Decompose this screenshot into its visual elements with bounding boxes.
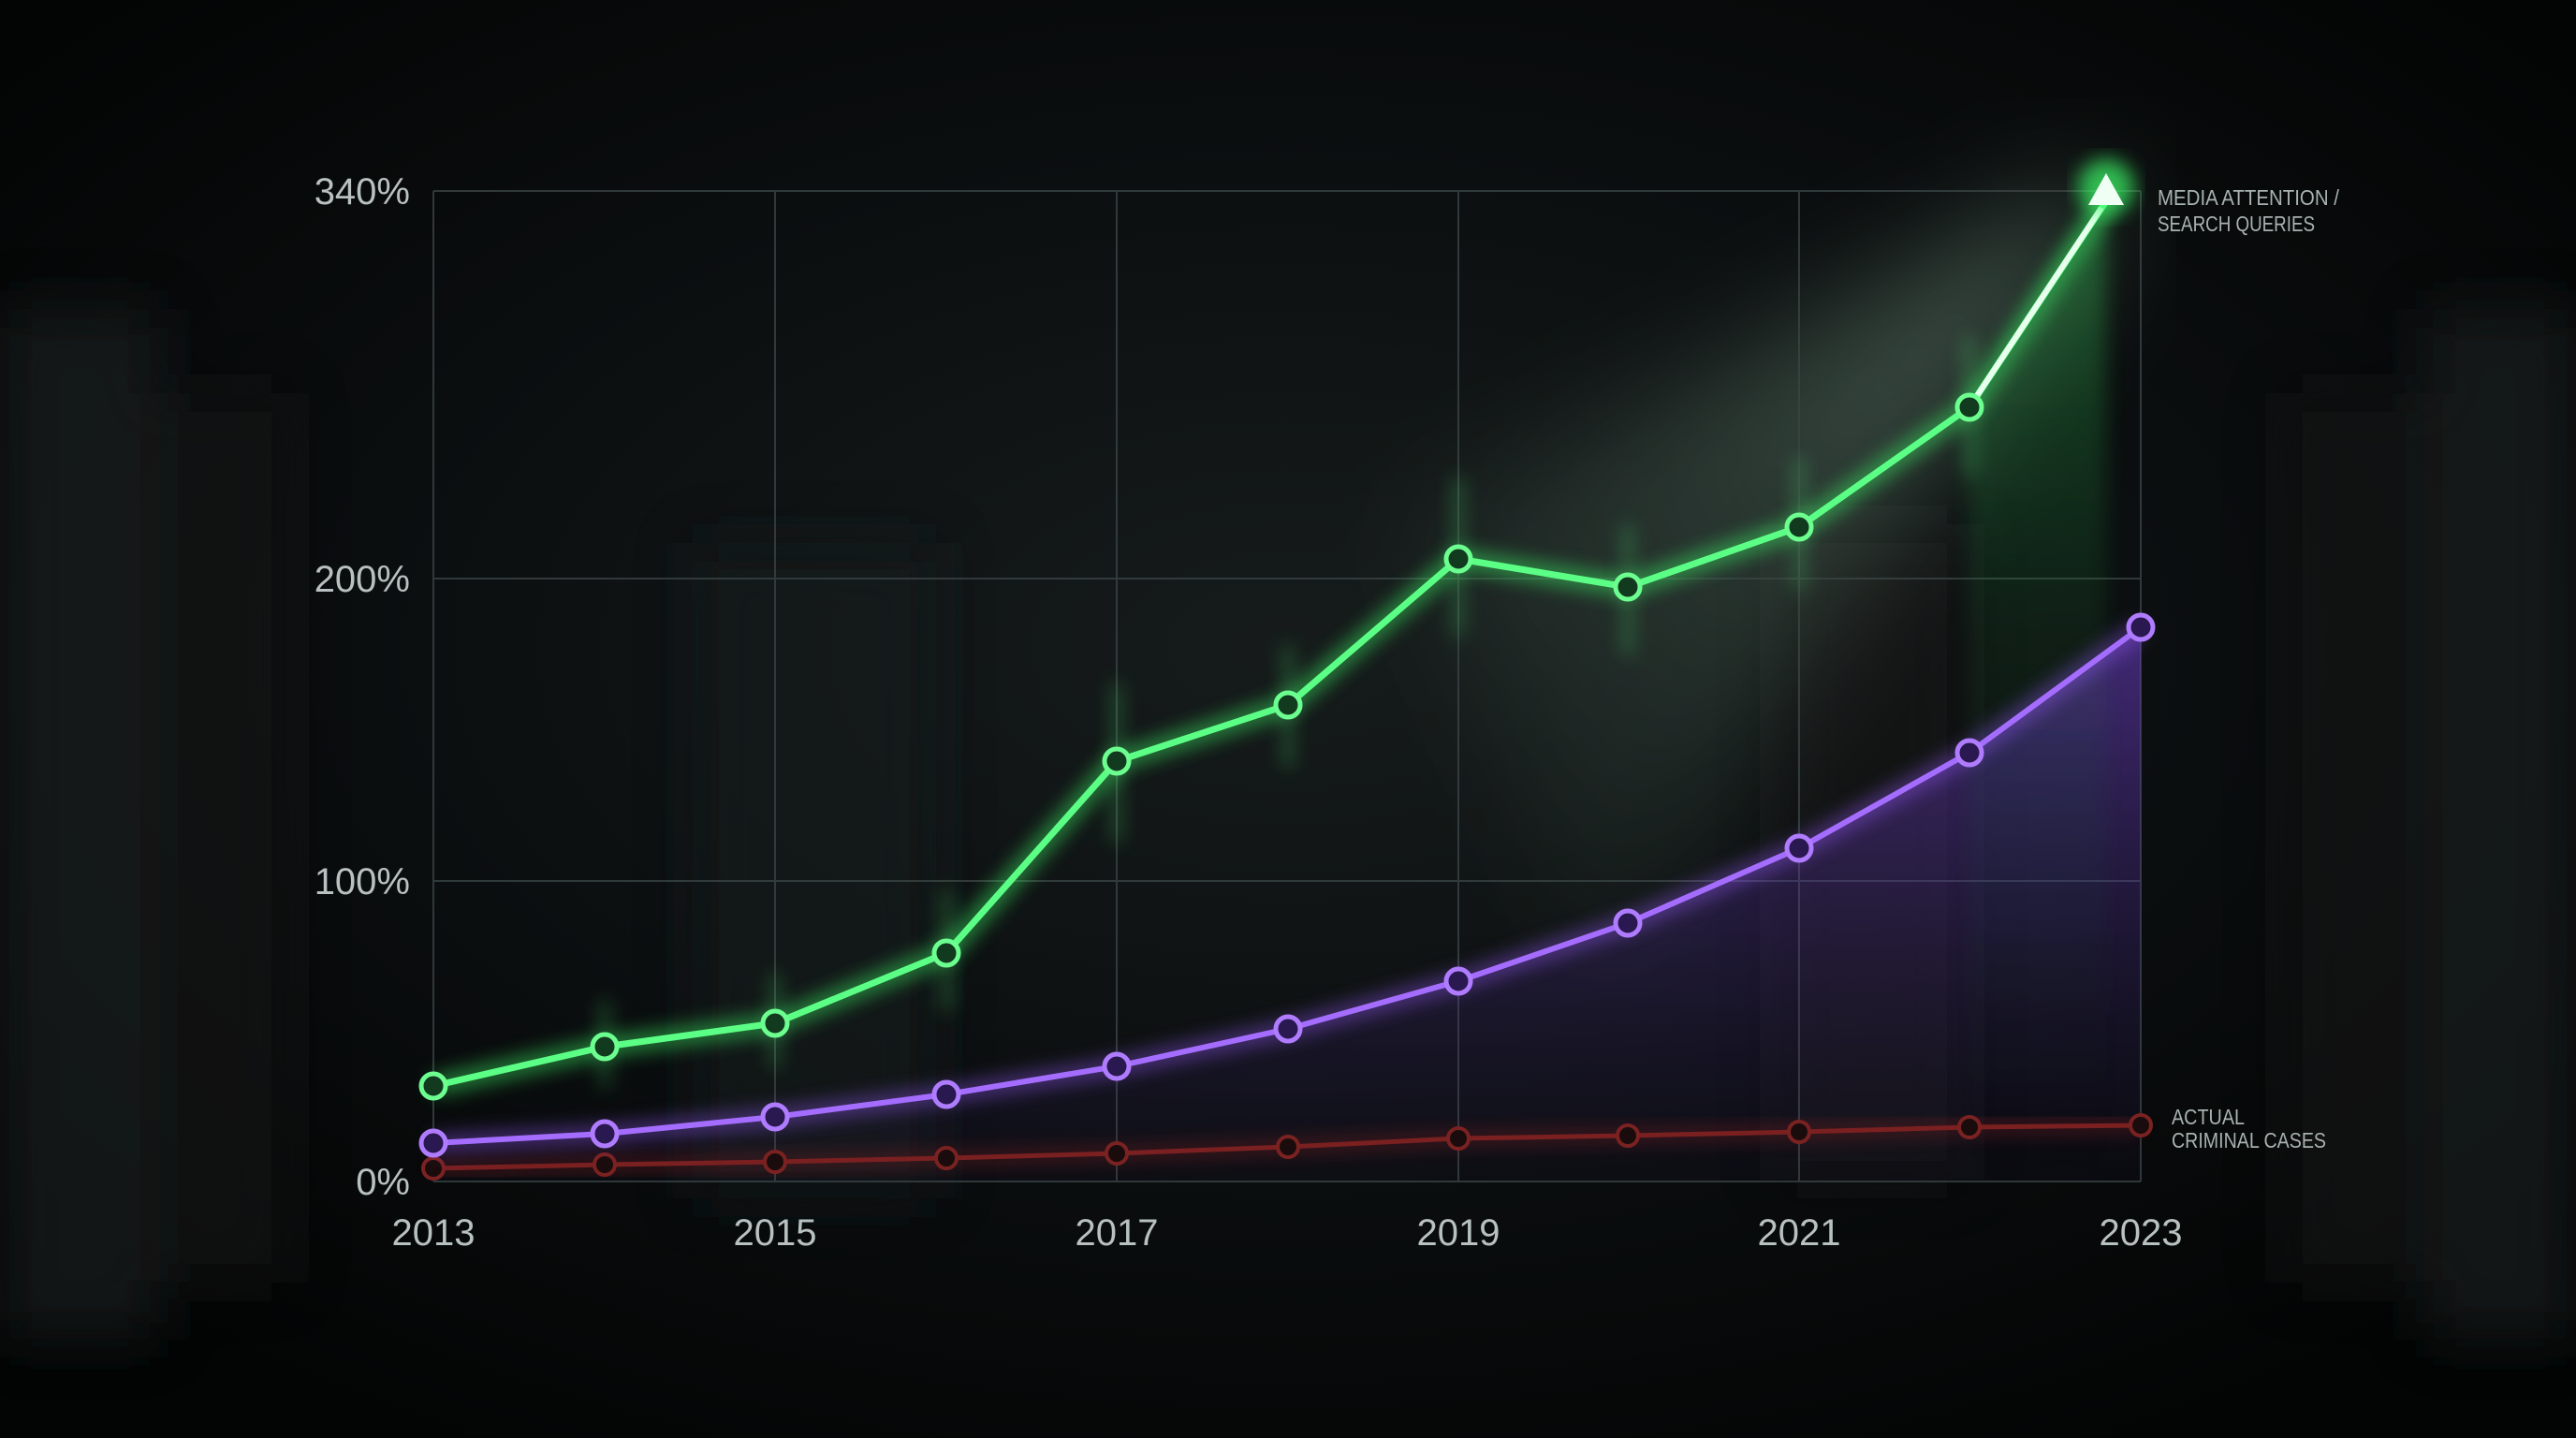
- x-axis labels: 2019: [1417, 1212, 1500, 1254]
- y-axis labels: 0%: [356, 1162, 410, 1203]
- legend: media attention: [2158, 185, 2340, 236]
- legend: actual criminal cases: [2172, 1105, 2326, 1152]
- x-axis labels: 2013: [392, 1212, 475, 1254]
- x-axis labels: 2015: [734, 1212, 816, 1254]
- legend: actual criminal cases: ACTUAL: [2172, 1105, 2245, 1129]
- legend: actual criminal cases: CRIMINAL CASES: [2172, 1128, 2326, 1152]
- y-axis labels: 340%: [315, 171, 410, 213]
- purple area: [433, 627, 2141, 1181]
- glow flares: [605, 337, 1969, 1086]
- x-axis labels: 2017: [1076, 1212, 1158, 1254]
- legend: media attention: MEDIA ATTENTION /: [2158, 185, 2340, 210]
- beam of light: [1404, 178, 2106, 983]
- legend: media attention: SEARCH QUERIES: [2158, 212, 2315, 236]
- x-axis labels: [392, 1212, 2182, 1254]
- grid: [433, 191, 2141, 1181]
- red line: actual criminal cases: [423, 1115, 2151, 1179]
- green area near arrow: [1969, 191, 2106, 1181]
- purple line: [421, 615, 2153, 1155]
- arrow head: [2078, 159, 2134, 215]
- green line: media attention: [421, 159, 2134, 1098]
- x-axis labels: 2023: [2100, 1212, 2182, 1254]
- y-axis labels: [315, 171, 410, 1203]
- x-axis labels: 2021: [1758, 1212, 1840, 1254]
- y-axis labels: 200%: [315, 559, 410, 600]
- y-axis labels: 100%: [315, 861, 410, 902]
- background: server racks: [0, 309, 2576, 1339]
